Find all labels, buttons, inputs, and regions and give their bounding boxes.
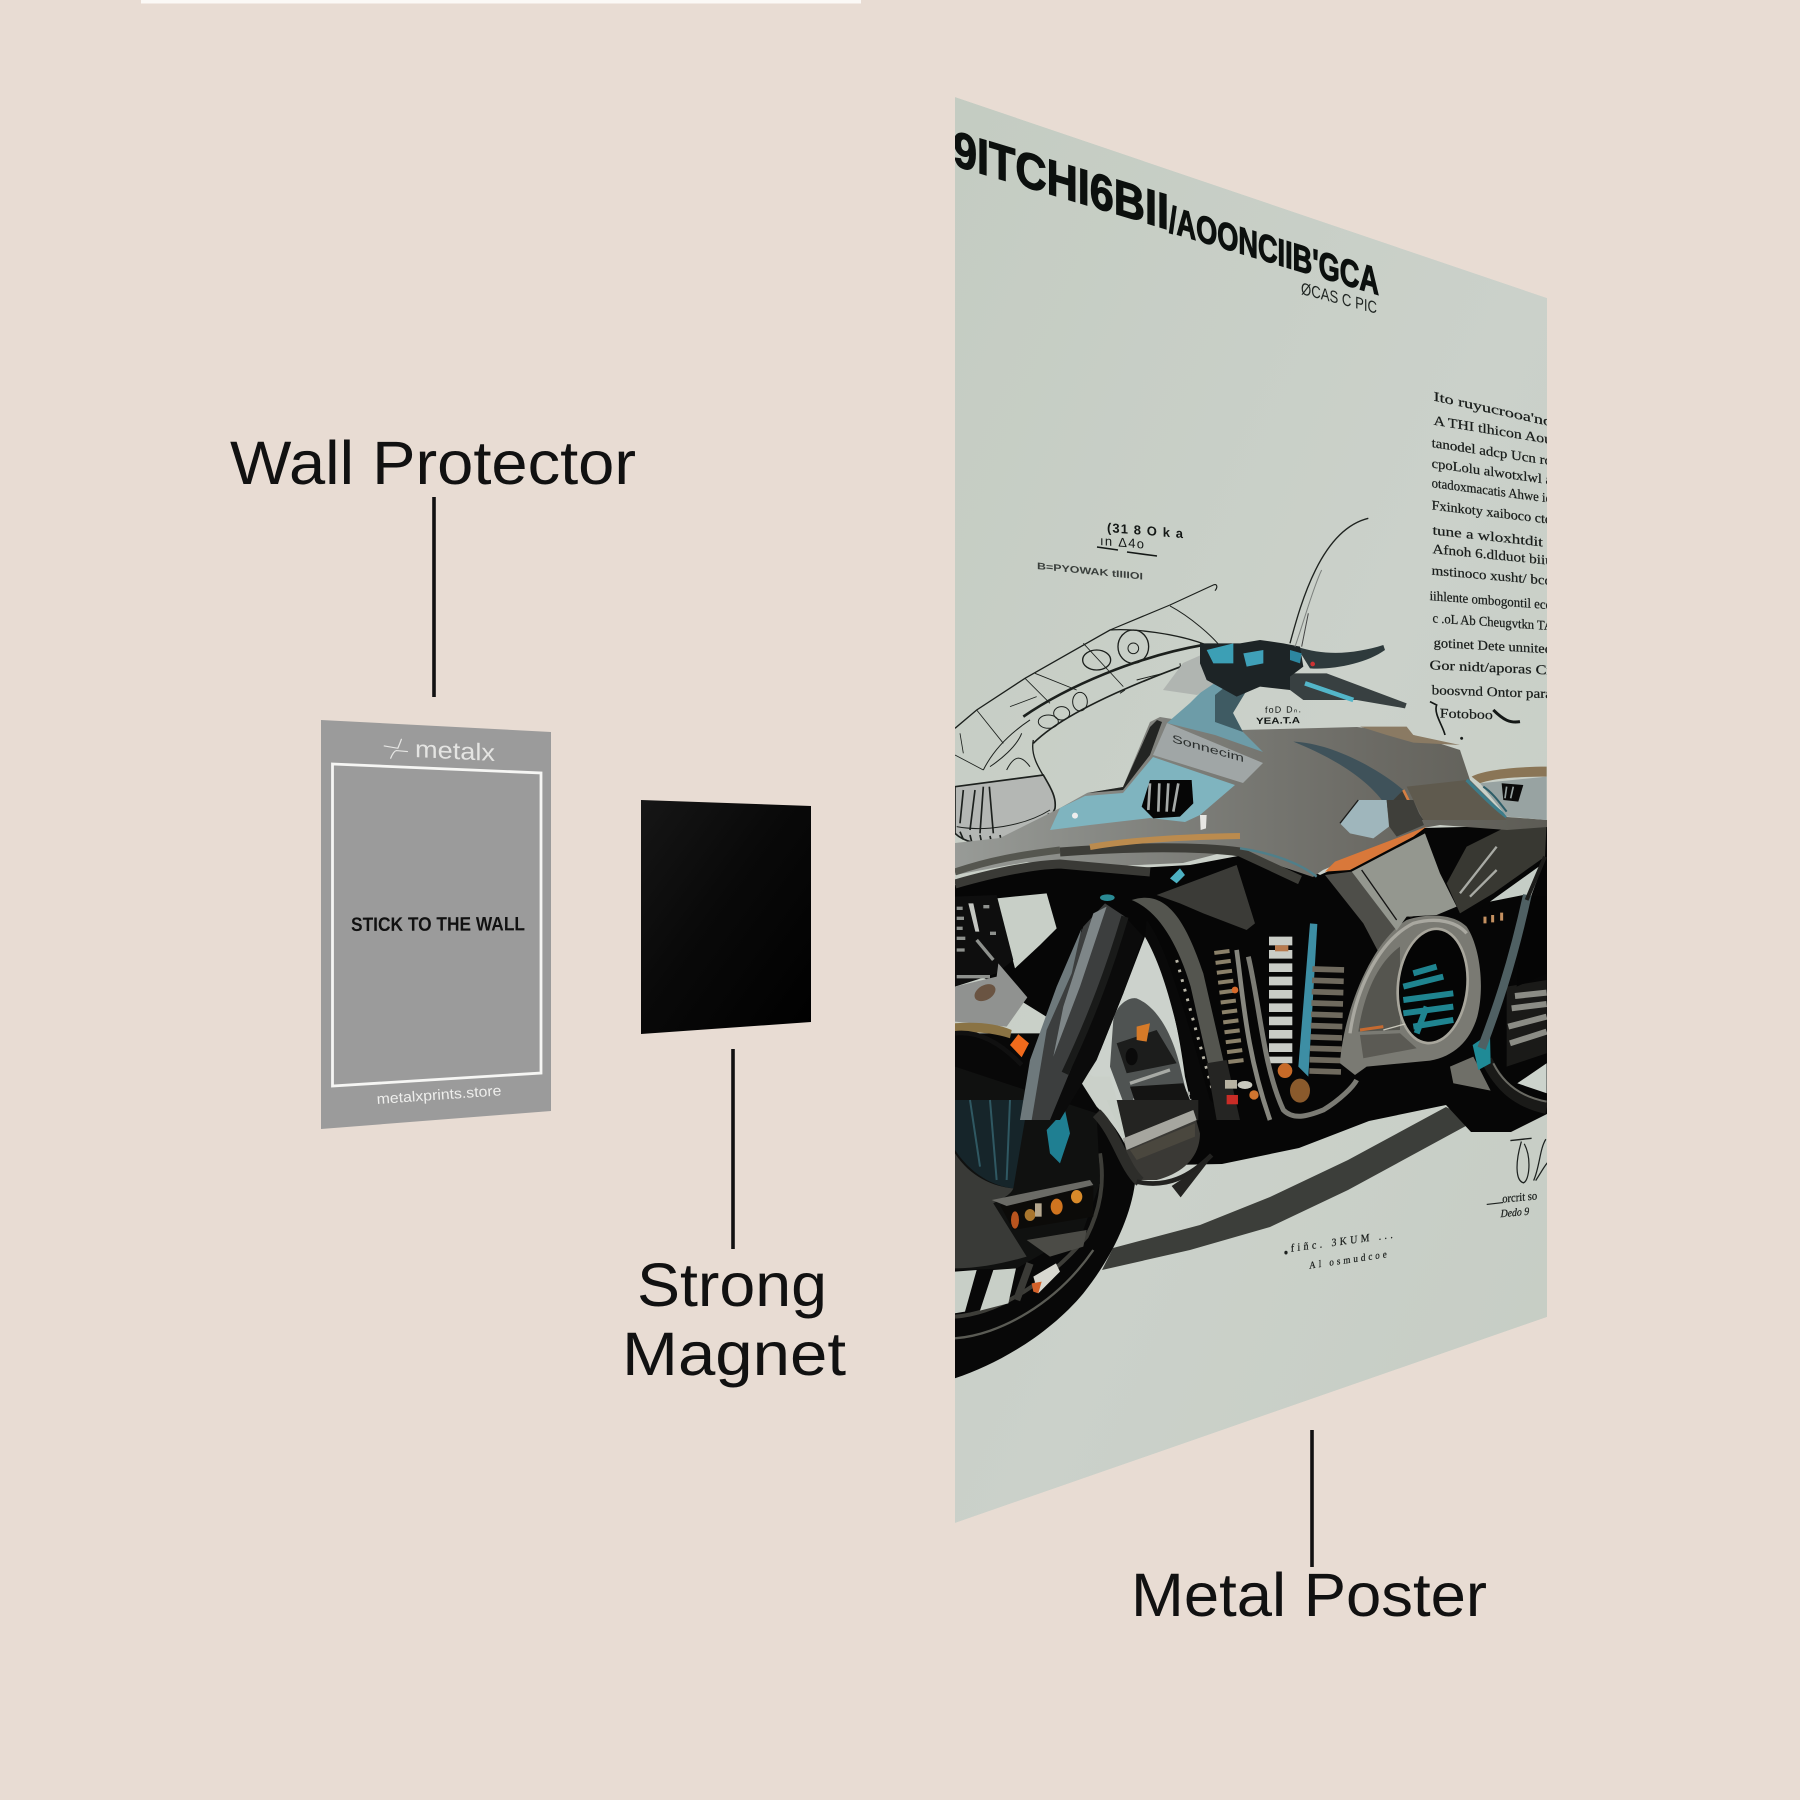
label: Strong Magnet: Magnet <box>622 1320 846 1388</box>
brake housing <box>1110 998 1186 1100</box>
corner notes and mini sketch: Dedo 9 <box>1500 1206 1530 1221</box>
poster title <box>955 132 1379 296</box>
swing panel <box>1325 872 1397 955</box>
upper right fairing panels <box>1293 727 1547 820</box>
corner notes and mini sketch: orcrit so <box>1502 1190 1538 1206</box>
neck <box>1167 672 1263 752</box>
curved arch <box>1132 898 1224 1065</box>
connector line: Metal Poster <box>1310 1430 1314 1567</box>
poster body text column: otadoxmacatis Ahwe id <box>1432 476 1553 506</box>
silver name panel <box>1153 723 1263 783</box>
ground notes: fiñc. 3KUM ... <box>1291 1230 1393 1255</box>
ground notes <box>1284 1230 1393 1272</box>
left radiator column <box>1222 950 1237 1067</box>
poster body text column: mstinoco xusht/ bco <box>1432 563 1552 588</box>
poster body text column: Afnoh 6.dlduot biiu <box>1432 542 1553 568</box>
blue nose panel <box>1050 757 1235 830</box>
lower brake bowl <box>1097 1100 1212 1197</box>
poster body text column: boosvnd Ontor para <box>1432 683 1552 701</box>
forks <box>1056 985 1126 1120</box>
poster subtitle: ØCAS C PIC <box>1301 278 1377 318</box>
website text: metalxprints.store <box>376 1083 502 1108</box>
antenna <box>1290 518 1368 643</box>
poster body text column: gotinet Dete unniteo <box>1434 635 1552 657</box>
corner notes and mini sketch <box>1487 1138 1548 1221</box>
frame window <box>997 893 1057 968</box>
poster body text column: tanodel adcp Ucn ro <box>1432 436 1552 468</box>
ground shadow <box>1102 1107 1475 1270</box>
small annotation: upper left: ın Δ4o <box>1100 533 1144 552</box>
central ribs <box>1269 936 1292 1064</box>
front wheel <box>955 1033 1135 1378</box>
fairing name text: Sonnecim <box>1172 733 1244 765</box>
note under handlebar: foD Dₙ. <box>1265 704 1301 715</box>
turbine cowl <box>1340 916 1481 1075</box>
fender strip <box>955 1023 1012 1038</box>
small annotation: upper left <box>1037 520 1184 583</box>
connector line: Wall Protector <box>432 497 436 697</box>
ground notes: Al osmudcoe <box>1309 1249 1387 1272</box>
poster body text column: Fxinkoty xaiboco ctd <box>1432 498 1553 527</box>
rear engine and turbine <box>1248 823 1547 1116</box>
fairing dark band <box>955 864 1150 884</box>
small annotation: upper left: B=PYOWAK tIIIIOI <box>1037 561 1143 583</box>
small annotation: upper left: (31 8 O k a <box>1107 520 1184 541</box>
sketch engine block <box>955 775 1055 845</box>
poster body text column: Ito ruyucrooa'no <box>1434 388 1552 430</box>
wing sketch <box>955 585 1222 787</box>
arm grey wedge <box>1163 648 1237 695</box>
poster body text column: tune a wloxhtdit r <box>1432 523 1554 551</box>
metal poster <box>953 97 1554 1523</box>
label: Strong Magnet: Strong <box>637 1251 827 1319</box>
rear wheel <box>1507 980 1547 1067</box>
dark chassis mass <box>955 825 1547 1165</box>
connector line: Strong Magnet <box>731 1049 735 1249</box>
poster body text column: iihlente ombogontil eco <box>1430 589 1552 613</box>
upper dark panel <box>1157 865 1255 930</box>
signature flourish <box>1430 702 1520 740</box>
note under handlebar: YEA.T.A <box>1256 715 1301 726</box>
note under handlebar <box>1256 706 1300 724</box>
left engine details <box>955 895 1013 987</box>
poster body text column: Gor nidt/aporas Cr <box>1430 658 1553 678</box>
main fairing <box>955 717 1547 877</box>
mid panel and orange stripe <box>1240 800 1457 931</box>
label: Wall Protector: Wall Protector <box>230 429 636 497</box>
logo: metalx: metalx <box>415 736 495 767</box>
cyan accent <box>1170 868 1185 883</box>
label: Strong Magnet <box>622 1251 846 1388</box>
engine, forks and fender <box>955 865 1270 1120</box>
handlebars <box>1200 518 1407 708</box>
poster body text column <box>1430 388 1554 722</box>
poster body text column: cpoLolu alwotxlwl a <box>1432 456 1552 488</box>
tail <box>1472 767 1547 783</box>
poster title: 9ITCHI6BII <box>953 120 1169 241</box>
rear triangle <box>1490 866 1539 902</box>
poster body text column: c .oL Ab Cheugvtkn TA <box>1432 611 1554 633</box>
poster title: /AOONCIIB'GCA <box>1169 199 1379 304</box>
strong magnet panel <box>641 800 811 1034</box>
poster body text column: Fotoboo <box>1440 706 1493 722</box>
opening behind fork <box>1100 936 1190 1099</box>
fairing orange line <box>1090 836 1240 847</box>
poster body text column: A THI tlhicon Aou <box>1434 413 1553 447</box>
instruction text: STICK TO THE WALL <box>351 913 525 936</box>
logo: metalx <box>384 736 495 767</box>
label: Metal Poster: Metal Poster <box>1131 1561 1487 1629</box>
wall protector panel <box>321 720 551 1129</box>
vent <box>1072 780 1207 830</box>
